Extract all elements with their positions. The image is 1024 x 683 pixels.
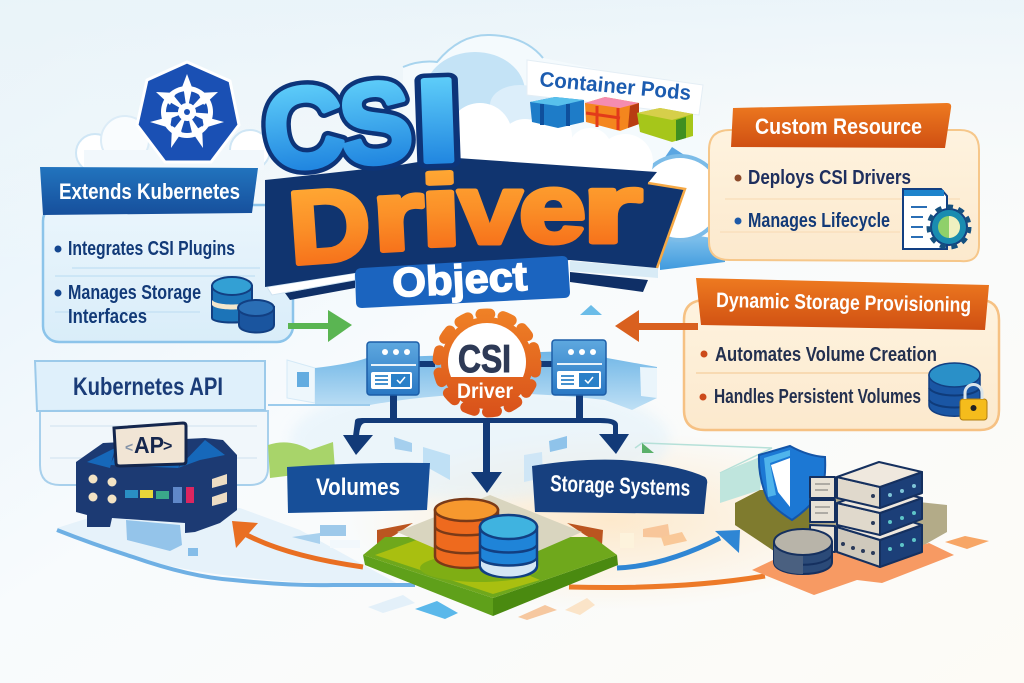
unit 3	[837, 512, 922, 567]
title: CSI: S	[333, 57, 418, 191]
icon: api gateway device: >	[163, 438, 172, 455]
panel: custom resource	[709, 103, 979, 261]
arrow: green	[288, 310, 352, 342]
icon: document with gear	[903, 189, 969, 249]
bullet: automates: Automates Volume Creation	[715, 344, 937, 366]
title: CSI: S	[333, 57, 418, 191]
heading band	[35, 361, 265, 411]
heading band: Kubernetes API	[73, 373, 223, 401]
scattered tiles right	[620, 524, 687, 548]
label: volumes	[287, 463, 430, 513]
title: Driver: i	[418, 155, 464, 268]
bullet: manages lifecycle: Manages Lifecycle	[748, 210, 890, 232]
icon: shield	[759, 446, 825, 520]
icon: csi gear: Driver	[457, 380, 513, 403]
bullet: manages storage: Manages Storage	[68, 282, 201, 304]
outline: teal backdrop	[635, 443, 772, 503]
heading band: Dynamic Storage Provisioning	[716, 289, 971, 317]
arrow: orange to api	[232, 521, 363, 567]
icon: blue database	[480, 515, 537, 577]
title: CSI: I	[412, 54, 463, 188]
title: Driver: v	[458, 154, 523, 264]
callout: container pods: Container Pods	[539, 68, 692, 105]
icon: kubernetes logo	[137, 62, 239, 162]
title: CSI: C	[257, 61, 350, 196]
icon: csi gear: CSI	[458, 338, 511, 381]
icon: orange database	[435, 499, 498, 568]
arrow: orange lower arc	[569, 576, 765, 588]
title: CSI	[257, 54, 463, 196]
icon: right interface card	[552, 340, 606, 395]
bullet: deploys: Deploys CSI Drivers	[748, 167, 911, 189]
title: Driver: e	[519, 153, 586, 263]
title: Driver	[285, 153, 642, 286]
decorative green blob	[268, 442, 335, 478]
bullet: manages storage	[54, 282, 201, 328]
title: Object pill	[355, 253, 570, 308]
title: Driver: D	[285, 166, 374, 286]
arrow: blue to servers	[617, 530, 740, 568]
title: Object pill: Object	[391, 253, 529, 306]
icon: small database	[774, 529, 832, 574]
heading band	[731, 103, 951, 148]
unit 2	[837, 488, 922, 535]
server platform	[735, 490, 989, 595]
heading band	[696, 278, 989, 330]
clouds behind title	[230, 35, 725, 270]
bullet: manages storage: Interfaces	[68, 306, 147, 328]
icon: blue pod	[530, 97, 584, 128]
icon: green pod	[637, 108, 693, 142]
icon: orange pod	[585, 97, 639, 131]
bullet: handles: Handles Persistent Volumes	[714, 386, 921, 408]
scattered chips	[394, 436, 567, 482]
icon: database stack	[212, 277, 274, 332]
callout: container pods	[527, 60, 703, 142]
icon: api gateway device: <	[125, 439, 133, 455]
icon: csi gear	[438, 314, 536, 412]
unit 1	[837, 462, 922, 508]
icon: database with lock	[929, 363, 987, 420]
title: CSI: I	[412, 54, 463, 188]
arrow: orange double	[615, 310, 698, 342]
icon: green platform with databases	[363, 495, 618, 616]
label: storage systems	[532, 460, 707, 514]
panel: extends kubernetes	[40, 167, 293, 342]
title: Driver: r	[369, 158, 427, 273]
scattered tiles left	[292, 525, 360, 548]
mid band behind gear	[268, 305, 657, 410]
platform with arc	[57, 508, 415, 585]
label: storage systems: Storage Systems	[550, 470, 691, 501]
heading band	[40, 167, 258, 215]
title: CSI: C	[257, 61, 350, 196]
label: volumes: Volumes	[316, 474, 400, 501]
panel: kubernetes api	[35, 361, 268, 485]
icon: left interface card	[367, 342, 419, 395]
scattered tiles bottom	[368, 595, 595, 620]
clouds behind logo	[76, 116, 270, 172]
bullet: integrates: Integrates CSI Plugins	[68, 238, 235, 260]
panel: dynamic storage provisioning	[684, 278, 999, 430]
title: Driver: r	[582, 153, 642, 263]
title banner	[265, 158, 685, 300]
heading band: Custom Resource	[755, 114, 922, 139]
icon: api gateway device: AP	[134, 432, 164, 458]
connector tree	[343, 361, 629, 493]
icon: server stack	[810, 462, 922, 567]
heading band: Extends Kubernetes	[59, 179, 240, 204]
icon: api gateway device	[76, 423, 237, 533]
